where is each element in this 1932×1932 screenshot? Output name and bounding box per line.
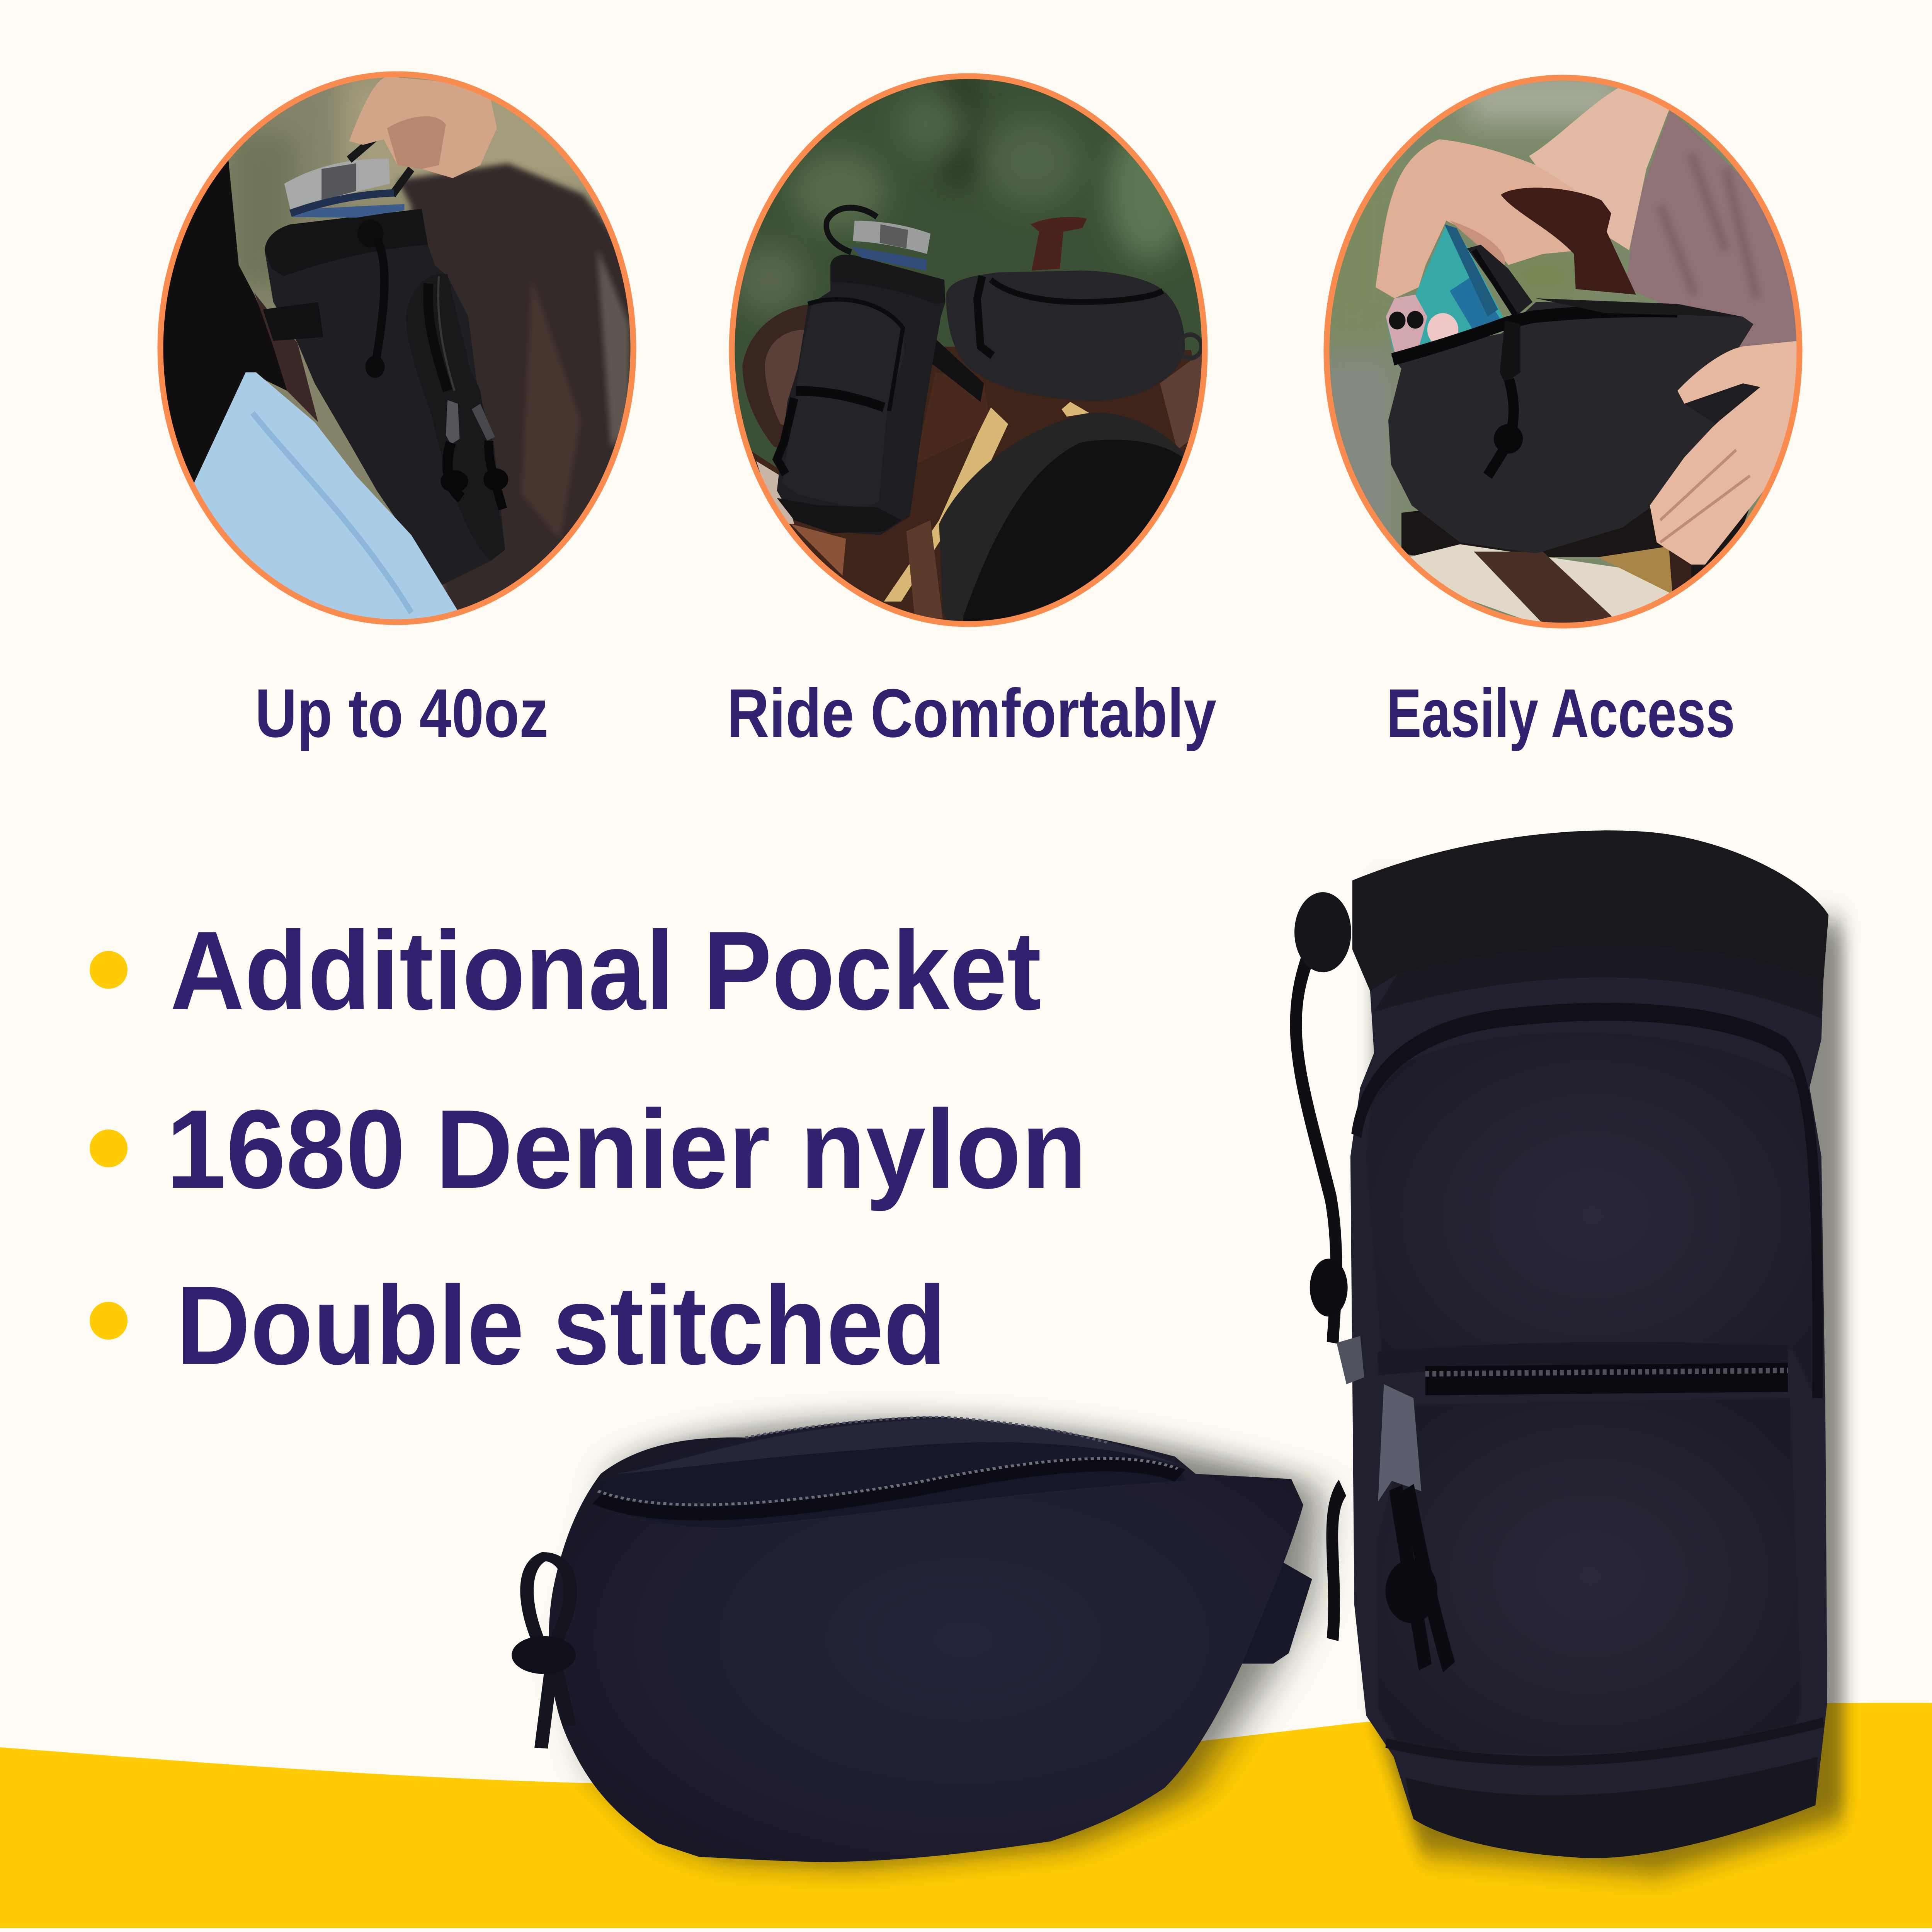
cord and toggle <box>357 219 384 248</box>
caption: Easily Access: Easily Access <box>1386 675 1735 752</box>
pouch <box>1388 302 1753 553</box>
collar <box>1352 830 1828 991</box>
product: waist pouch <box>512 1417 1320 1867</box>
photo circle: phone going into pouch <box>1315 73 1812 634</box>
lower pocket <box>1378 1398 1802 1754</box>
phone <box>1386 224 1505 352</box>
product: bottle holder <box>1294 830 1844 1874</box>
dark saddle under pouch <box>1401 428 1777 590</box>
orange ring <box>1327 78 1799 626</box>
right hand <box>1650 341 1805 565</box>
saddle blanket <box>1408 544 1674 628</box>
body <box>549 1417 1303 1862</box>
zipper flap <box>598 1441 1185 1527</box>
bottle <box>851 247 927 270</box>
bullet 2 <box>90 1129 128 1167</box>
cord <box>1296 949 1336 1343</box>
feature list <box>90 908 1087 1388</box>
caption: Ride Comfortably: Ride Comfortably <box>727 675 1216 752</box>
bullet 1 <box>90 951 128 989</box>
cord loop <box>527 1557 570 1748</box>
photo circle: bottle holder lifted by hand <box>155 70 653 635</box>
orange ring <box>160 74 633 622</box>
holder <box>777 255 946 535</box>
zipper pull <box>1378 1384 1421 1502</box>
yellow wave band <box>0 1703 1932 1928</box>
pouch <box>946 270 1185 401</box>
leather strap <box>906 520 942 620</box>
caption: Up to 40oz: Up to 40oz <box>255 675 548 752</box>
bottle <box>292 204 405 218</box>
jeans <box>194 372 458 628</box>
strap <box>263 302 323 341</box>
main pocket <box>1366 1032 1818 1398</box>
photo circle: holder and pouch on saddle <box>726 70 1213 635</box>
bag body <box>265 209 505 585</box>
feature: Additional Pocket: Additional Pocket <box>170 908 1041 1033</box>
feature: 1680 Denier nylon: 1680 Denier nylon <box>166 1087 1087 1212</box>
horse <box>395 159 631 610</box>
orange ring <box>732 76 1205 624</box>
bullet 3 <box>90 1302 128 1340</box>
woven saddle <box>254 293 318 422</box>
strap <box>1227 1557 1312 1663</box>
hand <box>1376 139 1581 298</box>
shirt <box>156 160 287 483</box>
saddle skirt <box>749 346 1208 635</box>
cantle <box>742 304 815 465</box>
fleece <box>884 407 1008 602</box>
pad and mane <box>939 413 1184 624</box>
arm <box>1529 88 1670 250</box>
shirt <box>1626 110 1812 361</box>
horn <box>1501 188 1636 294</box>
feature: Double stitched: Double stitched <box>176 1263 946 1388</box>
hand <box>349 77 497 178</box>
zipper pulls <box>446 400 459 444</box>
horn <box>1031 217 1087 270</box>
body <box>1350 830 1828 1858</box>
